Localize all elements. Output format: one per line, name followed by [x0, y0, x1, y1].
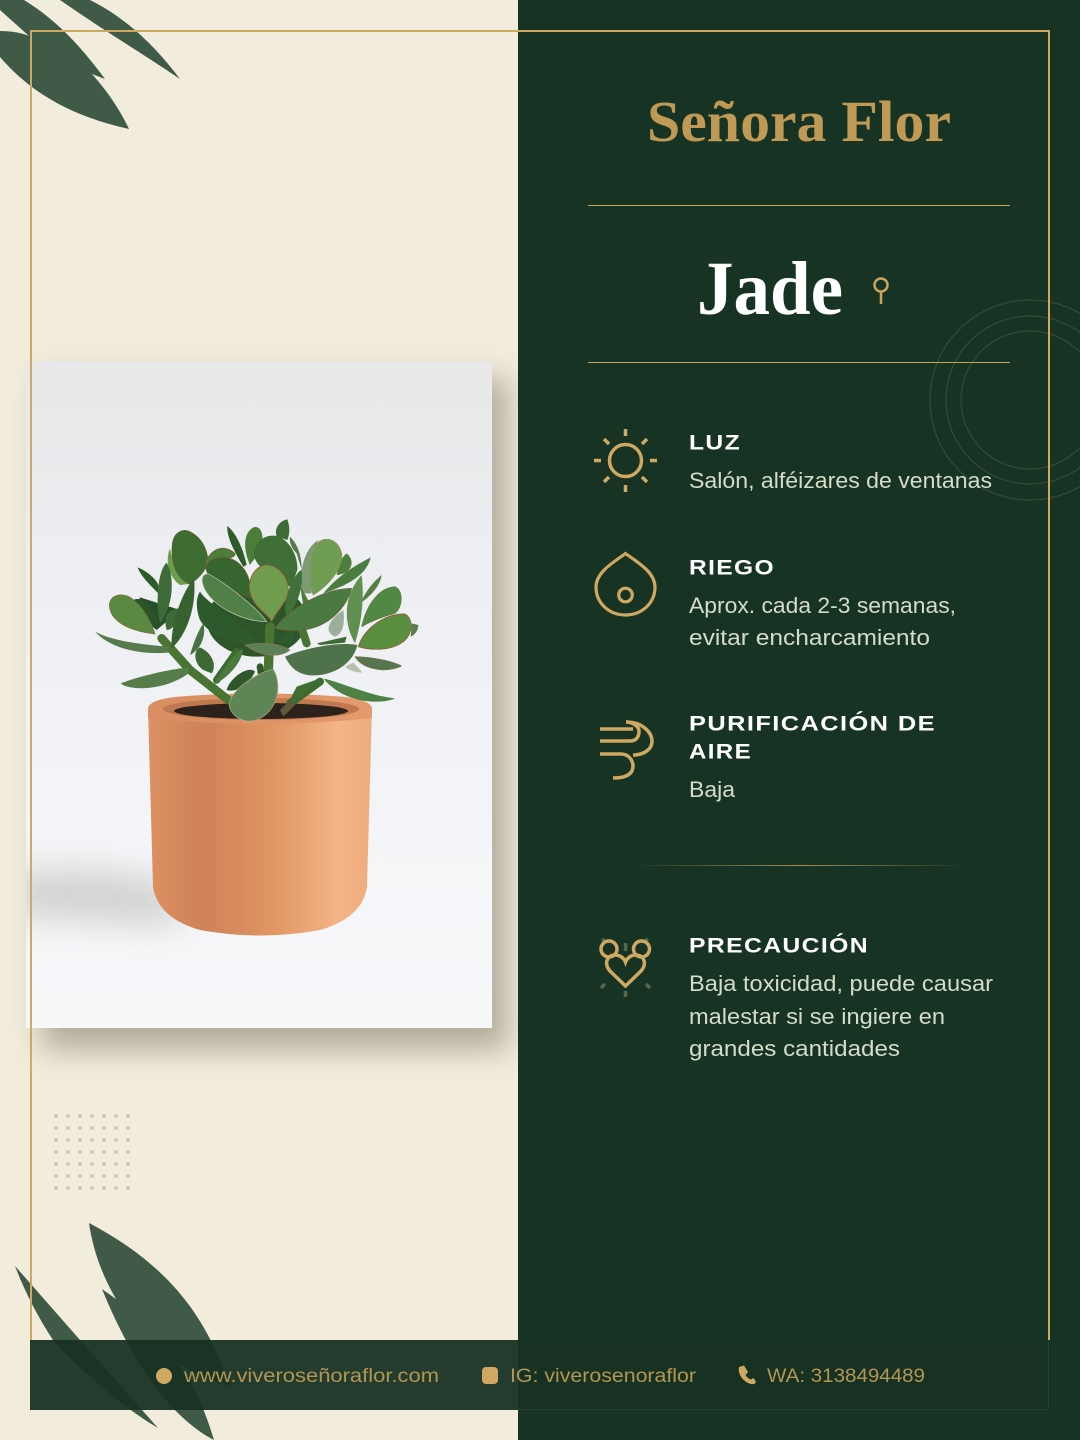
right dark panel	[518, 0, 1080, 1440]
icon: web dot	[156, 1368, 172, 1384]
brand title: Señora Flor	[647, 89, 951, 154]
decorative leaves: bottom left	[15, 1223, 232, 1440]
care item: precaucion	[601, 932, 994, 1061]
heading: luz: LUZ	[689, 430, 741, 454]
text: luz description: Salón, alféizares de ventanas	[689, 468, 992, 493]
pot cast shadow	[10, 870, 185, 925]
terracotta pot	[148, 694, 372, 936]
second divider	[588, 362, 1010, 363]
icon: instagram square	[482, 1367, 498, 1384]
dot pattern	[54, 1114, 130, 1190]
decorative leaves: top left	[0, 0, 180, 129]
footer bar	[30, 1340, 1050, 1410]
text: instagram: IG: viverosenoraflor	[510, 1366, 697, 1387]
heading: purificacion de aire: PURIFICACIÓN DE	[689, 710, 936, 736]
icon: phone	[739, 1366, 756, 1384]
heading: precaucion: PRECAUCIÓN	[689, 932, 869, 958]
heading: purificacion de aire: AIRE	[689, 740, 752, 764]
text: website: www.viveroseñoraflor.com	[183, 1366, 439, 1387]
text: precaucion description: malestar si se ingiere en	[689, 1004, 945, 1029]
icon: sun	[594, 429, 657, 492]
background: cream left panel	[0, 0, 518, 1440]
icon: water drop	[596, 554, 655, 615]
text: whatsapp: WA: 3138494489	[767, 1366, 925, 1387]
photo shadow	[42, 378, 508, 1050]
text: precaucion description: Baja toxicidad, puede causar	[689, 971, 994, 996]
faded divider	[630, 865, 970, 866]
text: riego description: Aprox. cada 2-3 semanas,	[689, 593, 956, 618]
care item: luz	[594, 429, 992, 493]
text: precaucion description: grandes cantidades	[689, 1036, 900, 1061]
icon: pin key	[874, 278, 888, 304]
care item: purificacion de aire	[600, 710, 936, 802]
jade plant foliage	[95, 519, 418, 721]
text: purificacion description: Baja	[689, 777, 735, 802]
plant name: Jade	[697, 247, 843, 331]
icon: wind	[600, 722, 652, 778]
stems	[162, 623, 320, 703]
text: riego description: evitar encharcamiento	[689, 625, 930, 650]
top divider	[588, 205, 1010, 206]
photo: jade plant in terracotta pot	[10, 362, 492, 1028]
heading: riego: RIEGO	[689, 556, 775, 580]
icon: heart with rings	[601, 939, 650, 997]
decorative concentric circles	[930, 300, 1080, 500]
care item: riego	[596, 554, 956, 650]
